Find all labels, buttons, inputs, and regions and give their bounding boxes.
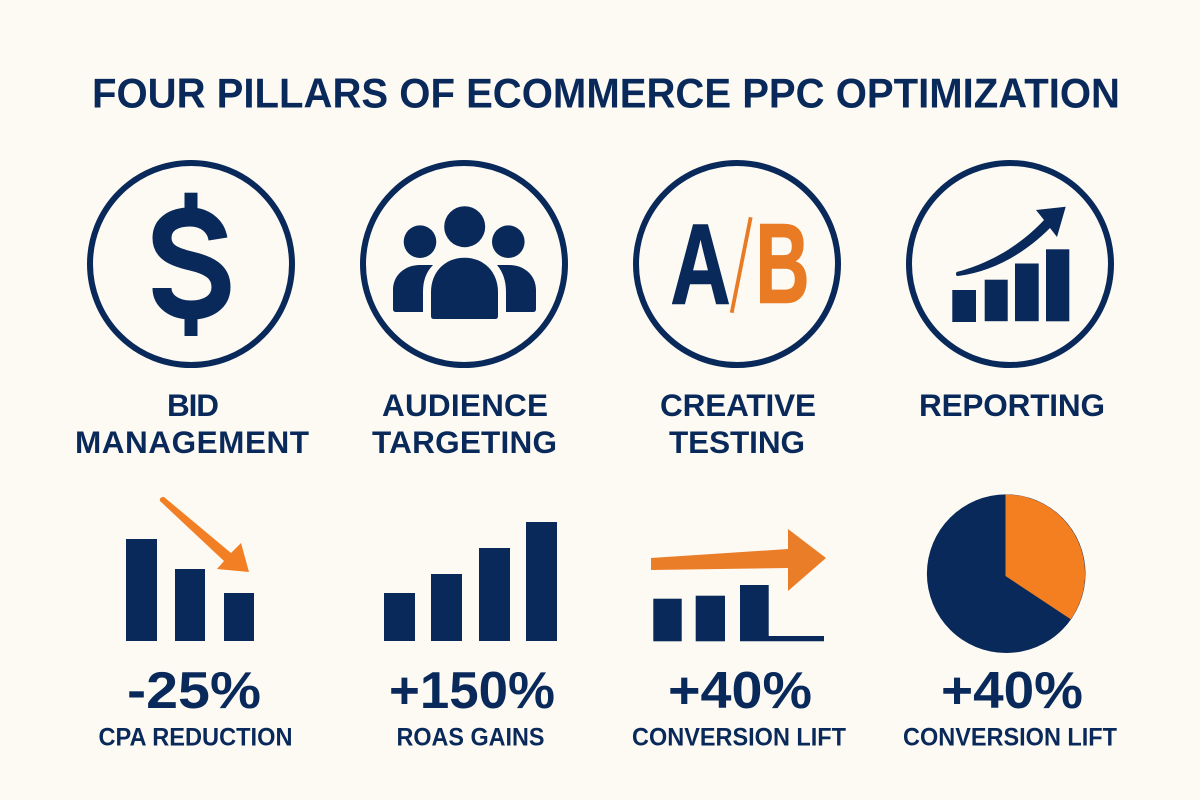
- label: creative testing: [660, 387, 816, 460]
- icon: audience in circle: [363, 163, 565, 365]
- icon: dollar sign in circle: [90, 163, 292, 365]
- stat: -25% CPA reduction: [98, 662, 292, 752]
- stat: +40% conversion lift (pie): [903, 662, 1117, 752]
- label: audience targeting: [372, 387, 557, 460]
- chart: declining bars with arrow: [126, 497, 254, 641]
- label: bid management: BID: [167, 387, 219, 423]
- label: creative testing: CREATIVE: [660, 387, 816, 423]
- stat: +150% ROAS gains: [389, 662, 555, 752]
- stat: -25% CPA reduction: -25%: [127, 662, 261, 720]
- stat: +150% ROAS gains: +150%: [389, 662, 555, 720]
- stat: +40% conversion lift: [632, 662, 846, 752]
- icon: A/B test in circle: [636, 163, 838, 365]
- icon: A/B test in circle: B: [756, 200, 810, 326]
- label: creative testing: TESTING: [669, 424, 805, 460]
- stat: +40% conversion lift (pie): +40%: [941, 662, 1083, 720]
- label: bid management: MANAGEMENT: [75, 424, 309, 460]
- icon: growth chart in circle: [909, 163, 1111, 365]
- stat: +150% ROAS gains: ROAS GAINS: [396, 724, 544, 752]
- chart: pie: [927, 494, 1086, 653]
- title: FOUR PILLARS OF ECOMMERCE PPC OPTIMIZATION: [92, 70, 1120, 116]
- stat: +40% conversion lift: +40%: [668, 662, 812, 720]
- label: bid management: [75, 387, 309, 460]
- stat: +40% conversion lift: CONVERSION LIFT: [632, 724, 846, 752]
- chart: bars with right arrow: [651, 529, 826, 641]
- stat: +40% conversion lift (pie): CONVERSION LIFT: [903, 724, 1117, 752]
- label: audience targeting: AUDIENCE: [382, 387, 548, 423]
- chart: rising bars: [384, 522, 557, 641]
- label: reporting: REPORTING: [919, 387, 1105, 423]
- icon: A/B test in circle: A: [670, 202, 730, 328]
- stat: -25% CPA reduction: CPA REDUCTION: [98, 724, 292, 752]
- label: audience targeting: TARGETING: [372, 424, 557, 460]
